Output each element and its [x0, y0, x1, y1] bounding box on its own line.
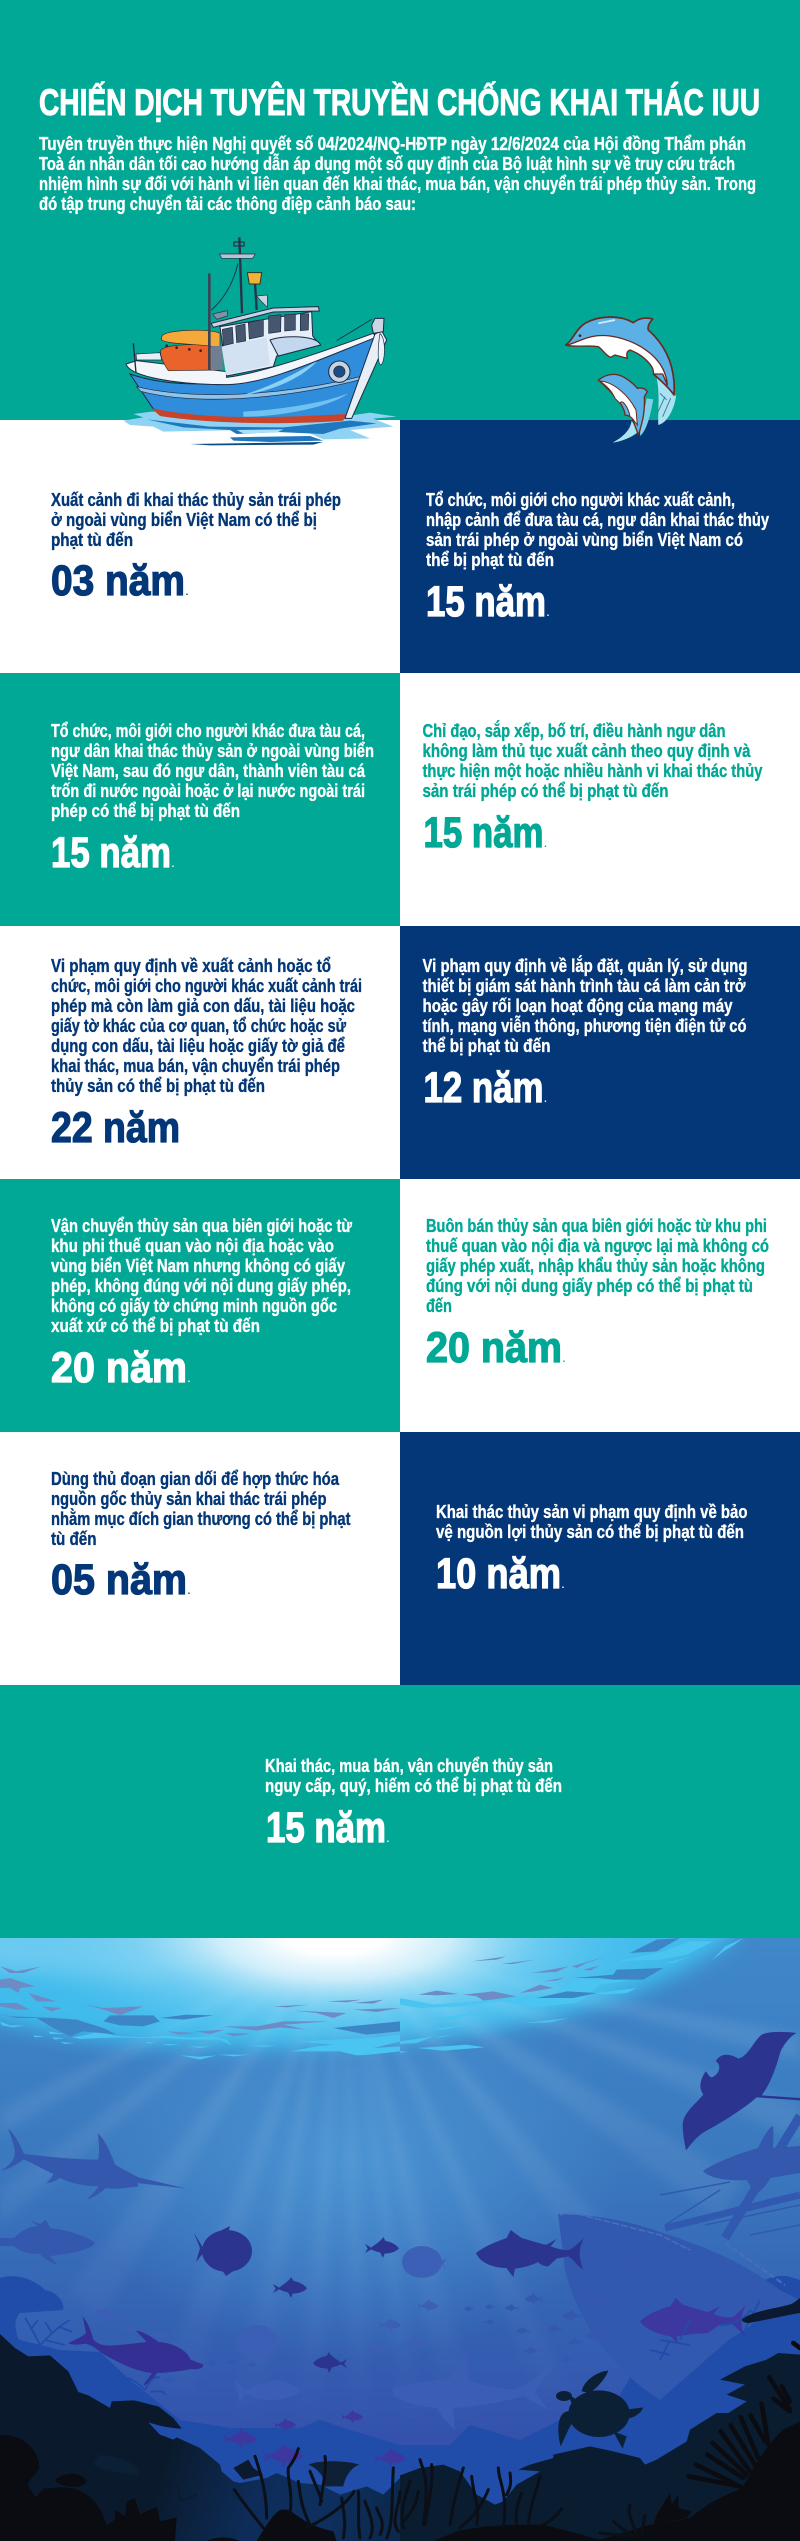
panel: cell 6 — [400, 926, 800, 1179]
surface glow — [0, 1938, 742, 2058]
swordfish — [2, 2129, 187, 2199]
panel: cell 4 — [400, 673, 800, 926]
description: sản trái phép ở ngoài vùng biển Việt Nam có — [426, 530, 743, 550]
shark behind mast — [703, 2126, 800, 2195]
surface ripples left — [0, 1966, 400, 2060]
penalty: 15 years: 15 năm — [51, 829, 171, 877]
description: hoặc gây rối loạn hoạt động của mạng máy — [422, 996, 732, 1016]
dark reef right — [400, 2353, 800, 2541]
description: phép có thể bị phạt tù đến — [51, 801, 240, 821]
purple fish — [68, 2298, 747, 2468]
coral layer: distant reef — [0, 2276, 800, 2504]
description: vệ nguồn lợi thủy sản có thể bị phạt tù đến — [436, 1522, 744, 1542]
penalty: 05 years: 05 năm — [51, 1556, 187, 1604]
description — [436, 1502, 748, 1542]
description: khai thác, mua bán, vận chuyển trái phép — [51, 1056, 340, 1076]
penalty: 15 years: . — [171, 854, 175, 870]
description — [51, 490, 341, 550]
illustration: underwater scene — [0, 1938, 800, 2541]
description: khu phi thuế quan vào nội địa hoặc vào — [51, 1236, 334, 1256]
description: xuất xứ có thể bị phạt tù đến — [51, 1316, 260, 1336]
description: Vi phạm quy định về xuất cảnh hoặc tổ — [51, 956, 331, 976]
penalty: 05 years: . — [187, 1581, 191, 1597]
description — [265, 1756, 562, 1796]
shipwreck — [558, 2116, 800, 2400]
penalty: 03 years: 03 năm — [51, 557, 185, 605]
description: vùng biển Việt Nam nhưng không có giấy — [51, 1256, 345, 1276]
description — [51, 956, 362, 1096]
water background — [0, 1938, 800, 2445]
description: Dùng thủ đoạn gian dối để hợp thức hóa — [51, 1469, 340, 1489]
description: ở ngoài vùng biển Việt Nam có thể bị — [51, 510, 317, 530]
description: thể bị phạt tù đến — [426, 550, 554, 570]
penalty: 10 years: . — [561, 1575, 565, 1591]
description: Khai thác thủy sản vi phạm quy định về bảo — [436, 1502, 748, 1522]
front reef and corals — [0, 2400, 402, 2541]
description — [426, 1216, 769, 1316]
penalty: 15 years: 15 năm — [424, 809, 544, 857]
penalty: 15 years: . — [386, 1829, 390, 1845]
description — [422, 955, 748, 1056]
blue branch corals — [25, 2300, 775, 2395]
penalty: 12 years: . — [544, 1089, 547, 1105]
description: Vận chuyển thủy sản qua biên giới hoặc từ — [51, 1216, 353, 1236]
panel: header — [0, 0, 800, 420]
description — [426, 490, 769, 570]
penalty: 10 years: 10 năm — [436, 1550, 561, 1598]
intro text — [39, 134, 756, 214]
penalty: 15 years: 15 năm — [266, 1804, 386, 1852]
description: dụng con dấu, tài liệu hoặc giấy tờ giả để — [51, 1036, 345, 1056]
description: sản trái phép có thể bị phạt tù đến — [422, 781, 668, 801]
dark fish over reef — [742, 2298, 800, 2323]
shark left — [0, 2220, 95, 2265]
panel: cell 1 — [0, 420, 400, 673]
fish school — [163, 2256, 657, 2405]
penalty: 15 years: . — [544, 834, 547, 850]
penalty: 20 years: . — [187, 1369, 191, 1385]
sun rays — [2, 1982, 800, 2264]
manta ray — [683, 2032, 800, 2150]
panel: cell 11 — [0, 1685, 800, 1938]
description: nguy cấp, quý, hiếm có thể bị phạt tù đến — [265, 1776, 562, 1796]
description: Chỉ đạo, sắp xếp, bố trí, điều hành ngư dân — [422, 720, 726, 741]
description — [422, 720, 762, 801]
panel: cell 7 — [0, 1179, 400, 1432]
description: không có giấy tờ chứng minh nguồn gốc — [51, 1296, 337, 1316]
description: phép mà còn làm giả con dấu, tài liệu hoặc — [51, 996, 355, 1016]
penalty: 20 years: . — [562, 1349, 566, 1365]
description: chức, môi giới cho người khác xuất cảnh trái — [51, 976, 362, 996]
description: tù đến — [51, 1529, 96, 1549]
panel: cell 10 — [400, 1432, 800, 1685]
faint fish — [93, 2246, 555, 2430]
panel: cell 9 — [0, 1432, 400, 1685]
description: phạt tù đến — [51, 530, 133, 550]
dark reef left — [0, 2334, 400, 2541]
description: thể bị phạt tù đến — [422, 1036, 550, 1056]
description: nguồn gốc thủy sản khai thác trái phép — [51, 1489, 327, 1509]
panel: cell 2 — [400, 420, 800, 673]
description: đến — [426, 1296, 452, 1316]
sea turtle — [556, 2371, 643, 2449]
description: giấy tờ khác của cơ quan, tổ chức hoặc sử — [51, 1016, 347, 1036]
description: Việt Nam, sau đó ngư dân, thành viên tàu cá — [51, 761, 366, 781]
penalty: 15 years: . — [546, 603, 550, 619]
description: thủy sản có thể bị phạt tù đến — [51, 1076, 265, 1096]
description: ngư dân khai thác thủy sản ở ngoài vùng biển — [51, 741, 374, 761]
description: trốn đi nước ngoài hoặc ở lại nước ngoài trái — [51, 781, 365, 801]
description: phép, không đúng với nội dung giấy phép, — [51, 1276, 351, 1296]
illustration: jumping dolphins — [566, 317, 676, 443]
penalty: 15 years: 15 năm — [426, 578, 546, 626]
penalty: 20 years: 20 năm — [51, 1344, 187, 1392]
penalty: 03 years: . — [185, 582, 189, 598]
penalty: 12 years: 12 năm — [424, 1064, 544, 1112]
description: Khai thác, mua bán, vận chuyển thủy sản — [265, 1756, 553, 1776]
dark fish — [194, 2226, 584, 2373]
description — [51, 721, 374, 821]
penalty: 20 years: 20 năm — [426, 1324, 562, 1372]
description — [51, 1469, 350, 1549]
surface ripples right — [400, 1938, 743, 2053]
panel: cell 5 — [0, 926, 400, 1179]
description: nhằm mục đích gian thương có thể bị phạt — [51, 1508, 350, 1529]
description: Tổ chức, môi giới cho người khác đưa tàu cá, — [51, 721, 365, 741]
panel: cell 8 — [400, 1179, 800, 1432]
intro text: đó tập trung chuyển tải các thông điệp cảnh báo sau: — [39, 194, 416, 214]
panel: cell 3 — [0, 673, 400, 926]
description — [51, 1216, 353, 1336]
illustration: fishing boat — [123, 237, 397, 445]
description: Xuất cảnh đi khai thác thủy sản trái phép — [51, 490, 341, 510]
penalty: 22 years: 22 năm — [51, 1104, 180, 1152]
